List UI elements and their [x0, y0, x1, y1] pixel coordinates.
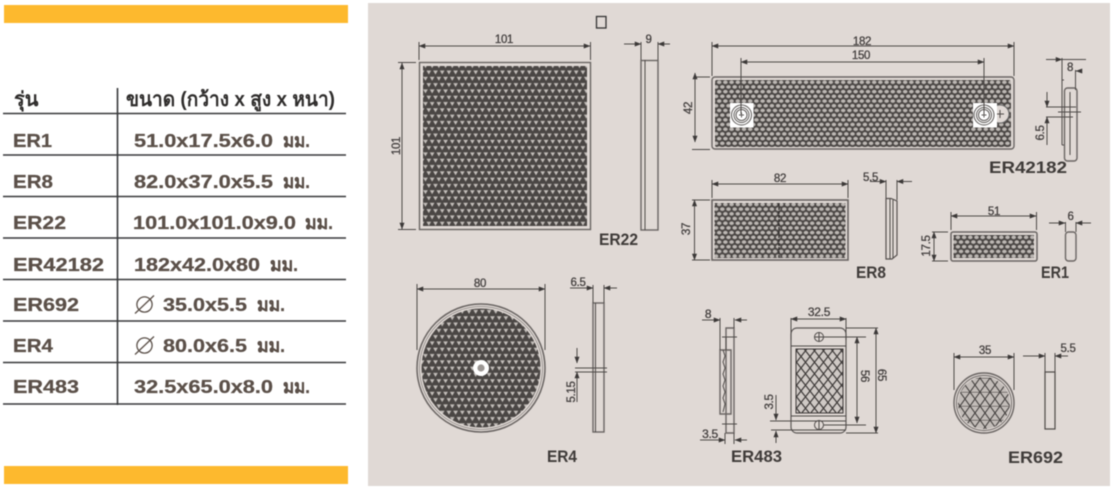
drawing: ER1: ER1: [1041, 264, 1069, 282]
drawing: ER483: 3.5: [764, 394, 776, 410]
row: ER692: มม.: [257, 294, 285, 315]
row: ER1: [13, 130, 310, 151]
drawing: ER22: ER22: [599, 231, 638, 249]
panel: size table: [3, 88, 346, 405]
row: ER42182: มม.: [270, 254, 298, 275]
drawing: ER483: 32.5: [808, 305, 831, 319]
row: ER42182: 182x42.0x80: [134, 254, 260, 275]
row: ER1: มม.: [283, 130, 310, 151]
row: ER4: มม.: [257, 335, 285, 356]
row: ER8: ER8: [13, 171, 53, 192]
drawing: ER8: 37: [681, 223, 693, 235]
drawing: ER1: [921, 206, 1091, 282]
drawing: ER692: ER692: [1008, 449, 1063, 467]
drawing: ER692: 35: [979, 345, 991, 357]
drawing: ER42182: 182: [853, 36, 871, 48]
drawing: ER8: [681, 172, 912, 282]
row: ER692: [13, 294, 285, 315]
drawing: ER22: 101: [495, 34, 513, 46]
drawing: ER8: 5.5: [863, 172, 878, 184]
drawing: ER42182: 6.5: [1035, 125, 1047, 141]
drawing: ER1: 51: [988, 206, 1000, 218]
small square glyph: [596, 16, 606, 28]
drawing: ER4: 6.5: [570, 277, 586, 289]
top orange bar: [4, 5, 348, 23]
drawing: ER22: 9: [645, 34, 652, 46]
row: ER483: [13, 376, 310, 397]
drawing: ER42182: ER42182: [989, 159, 1067, 177]
drawing: ER8: 82: [774, 173, 786, 185]
row: ER4: ER4: [13, 335, 54, 356]
drawing: ER22: 101: [391, 137, 403, 155]
bottom orange bar: [4, 466, 348, 484]
row: ER692: ER692: [13, 294, 79, 315]
drawing: ER42182: 42: [683, 102, 695, 114]
drawing: ER483: 56: [858, 370, 870, 382]
table header: model: รุ่น: [14, 89, 39, 112]
row: ER1: 51.0x17.5x6.0: [134, 130, 273, 151]
drawing: ER4: [417, 277, 617, 466]
row: ER42182: [13, 254, 298, 275]
drawing: ER483: 65: [875, 369, 887, 381]
row: ER42182: ER42182: [13, 254, 104, 275]
row: ER692: 35.0x5.5: [163, 294, 247, 315]
row: ER8: [13, 171, 310, 192]
drawing: ER483: 8: [705, 307, 712, 321]
row: ER22: [13, 212, 333, 233]
drawing: ER1: 6: [1067, 211, 1074, 223]
row: ER22: ER22: [13, 212, 66, 233]
drawing: ER692: 5.5: [1060, 343, 1076, 355]
drawing: ER1: 17.5: [921, 235, 933, 257]
drawing: ER483: ER483: [731, 448, 782, 466]
drawing: ER42182: 8: [1067, 62, 1073, 74]
panel: technical drawings: [368, 3, 1110, 486]
row: ER4: 80.0x6.5: [163, 335, 247, 356]
drawing: ER42182: 150: [852, 50, 870, 62]
row: ER8: มม.: [283, 171, 310, 192]
row: ER22: มม.: [305, 212, 333, 233]
drawing: ER8: ER8: [856, 264, 886, 282]
drawing: ER42182: [683, 36, 1086, 177]
drawing: ER4: 80: [474, 278, 486, 290]
drawing: ER483: [700, 305, 887, 466]
row: ER483: ER483: [13, 376, 79, 397]
drawing: ER692: [954, 343, 1076, 467]
drawing: ER483: 3.5: [702, 427, 719, 441]
table header: dimensions: ขนาด (กว้าง x สูง x หนา): [126, 88, 335, 113]
row: ER483: 32.5x65.0x8.0: [134, 376, 273, 397]
drawing: ER4: 5.15: [566, 381, 578, 403]
drawing: ER22: [391, 34, 670, 249]
row: ER8: 82.0x37.0x5.5: [134, 171, 273, 192]
drawing: ER4: ER4: [547, 448, 578, 466]
row: ER1: ER1: [13, 130, 52, 151]
row: ER483: มม.: [283, 376, 310, 397]
row: ER22: 101.0x101.0x9.0: [133, 212, 296, 233]
row: ER4: [13, 335, 285, 356]
